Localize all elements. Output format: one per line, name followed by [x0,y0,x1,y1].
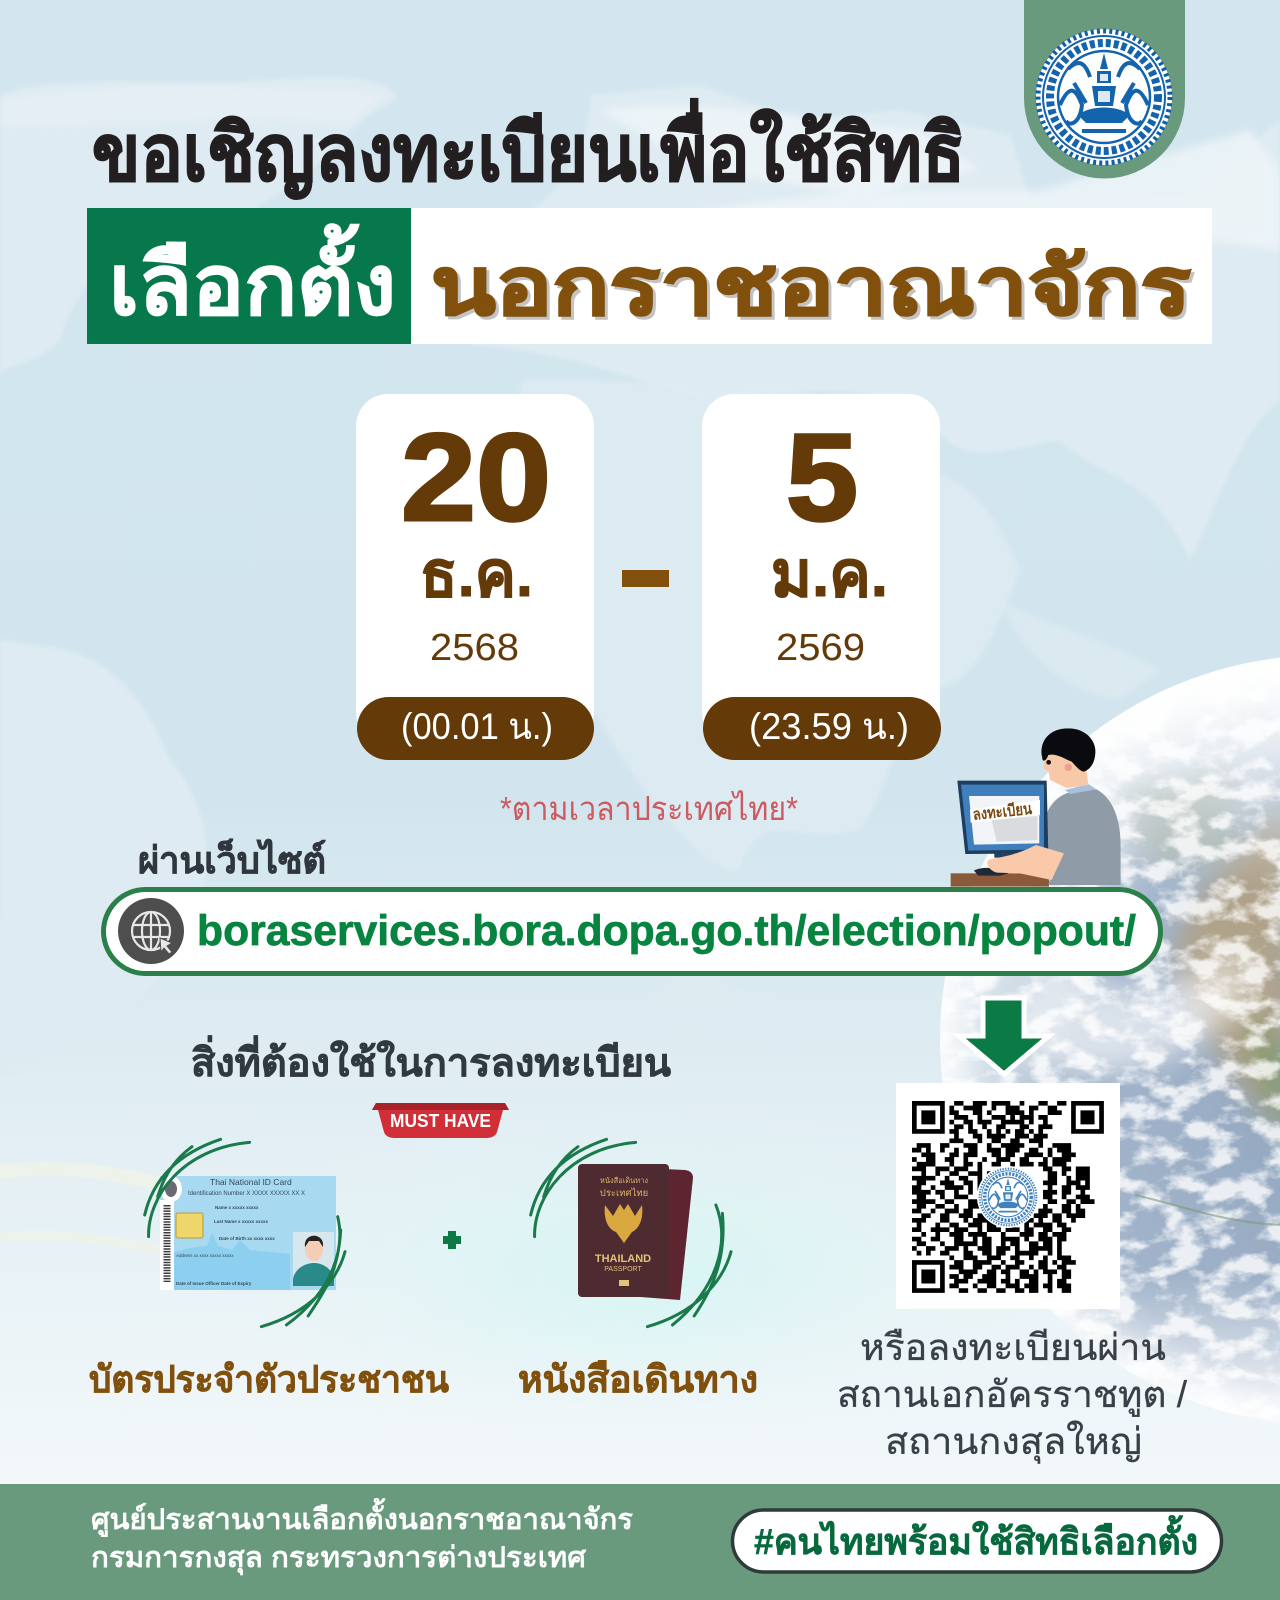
date card: start: (00.01 น.) [401,706,553,747]
title banner: เลือกตั้ง [109,223,396,332]
swoosh at left [0,1168,160,1250]
icon: national ID card: Address xx xxxx xxxxx xxxxx [176,1253,234,1258]
label: passport: หนังสือเดินทาง [518,1359,758,1400]
title banner: นอกราชอาณาจักร [434,245,1194,334]
title banner [87,208,1212,344]
title banner: นอกราชอาณาจักร [431,242,1191,331]
footer organisation text [91,1497,633,1575]
icon: passport: THAILAND [595,1253,651,1265]
must have ribbon [372,1103,509,1138]
earth globe [930,650,1280,1430]
label: ID card: บัตรประจำตัวประชาชน [89,1359,449,1400]
plus sign [443,1231,461,1249]
footer bar: #คนไทยพร้อมใช้สิทธิเลือกตั้ง [754,1515,1198,1562]
date card: end: 5 [786,409,858,547]
footer organisation text: ศูนย์ประสานงานเลือกตั้งนอกราชอาณาจักร [91,1497,633,1537]
embassy note: หรือลงทะเบียนผ่าน [860,1327,1166,1368]
url text: boraservices.bora.dopa.go.th/election/popout/ [197,907,1136,955]
website label: ผ่านเว็บไซต์ [138,837,326,881]
hashtag pill [732,1510,1222,1572]
icon: national ID card [160,1176,336,1290]
icon: national ID card: Last Name x xxxxx xxxxx [214,1219,269,1224]
embassy note [837,1327,1188,1464]
icon: passport: หนังสือเดินทาง [600,1176,648,1185]
title line 1: ขอเชิญลงทะเบียนเพื่อใช้สิทธิ [92,98,965,199]
QR centre emblem [977,1166,1039,1228]
must have ribbon: MUST HAVE [390,1111,491,1131]
icon: passport: ประเทศไทย [600,1187,648,1199]
date card: end: 2569 [776,627,865,669]
date card: end [702,394,941,760]
icon: passport [578,1164,693,1300]
icon: national ID card: Name x xxxxx xxxxx [215,1205,259,1210]
dash between dates [622,570,669,587]
logo shield [1024,0,1185,179]
arcs around passport [531,1139,731,1327]
icon: national ID card: Thai National ID Card [210,1177,292,1187]
world map background [0,77,1280,1075]
icon: national ID card: Date of Birth xx xxxx xxxx [219,1236,275,1241]
arrow down to QR [959,998,1049,1074]
embassy note: สถานกงสุลใหญ่ [885,1420,1142,1464]
icon: globe cursor [118,898,184,964]
icon: passport: PASSPORT [604,1266,642,1273]
date card: end: (23.59 น.) [749,706,909,747]
url pill [104,890,1160,974]
date card: end: ม.ค. [771,538,888,610]
embassy note: สถานเอกอัครราชทูต / [837,1374,1188,1417]
person at computer [951,728,1121,887]
footer organisation text: กรมการกงสุล กระทรวงการต่างประเทศ [91,1542,587,1575]
date card: start: 20 [401,409,551,547]
icon: national ID card: Identification Number X XXXX XXXXX XX X [188,1191,305,1197]
date card: start: ธ.ค. [420,538,533,610]
emblem of the department [1036,29,1172,165]
footer bar [0,1484,1280,1600]
date card: start: 2568 [430,627,519,669]
person at computer: ลงทะเบียน [972,799,1033,824]
date card: start [356,394,594,760]
time note: *ตามเวลาประเทศไทย* [500,790,798,827]
arcs around ID card [145,1139,345,1327]
requirements heading: สิ่งที่ต้องใช้ในการลงทะเบียน [191,1035,671,1085]
icon: national ID card: Date of Issue Officer Date of Expiry [176,1281,252,1286]
QR code [896,1083,1120,1309]
lower soft glow [210,1100,1070,1440]
